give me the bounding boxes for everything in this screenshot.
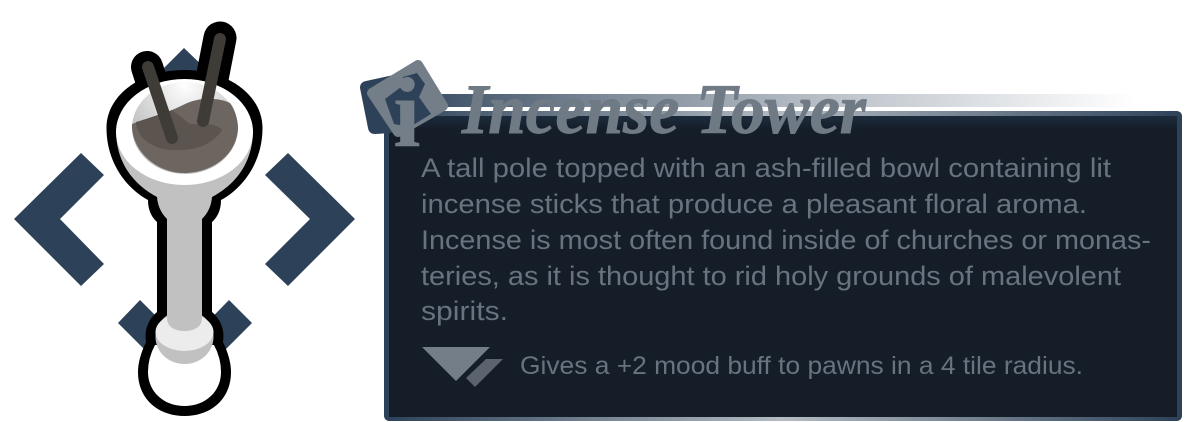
marker large triangle (422, 347, 490, 381)
badge inner mark (385, 73, 431, 127)
bowl underside (116, 130, 253, 320)
panel bottom border (384, 414, 1182, 421)
panel: description (384, 94, 1182, 421)
icon: incense tower (106, 38, 262, 416)
badge front square (372, 65, 443, 132)
text block: effect: Gives a +2 mood buff to pawns in a 4 tile radius. (520, 352, 1083, 380)
chevron: right (265, 153, 355, 286)
title: Incense Tower (461, 71, 867, 149)
badge back square (360, 74, 425, 134)
icon: info badge (360, 57, 443, 168)
panel top border (384, 111, 1182, 118)
marker small shard (466, 359, 503, 387)
text block: description: spirits. (421, 296, 508, 326)
title ribbon (386, 94, 1136, 108)
icon: effect marker (422, 347, 503, 387)
chevron: left (14, 153, 104, 286)
text block: description: incense sticks that produce a pleasant floral aroma. (421, 189, 1087, 219)
text block: description: Incense is most often found inside of churches or monas- (421, 225, 1151, 255)
badge letter: i (393, 57, 421, 168)
base collar (156, 310, 214, 364)
ash shadow (136, 110, 222, 150)
incense stick left (148, 67, 172, 138)
tower stem (167, 215, 202, 331)
tower outline (106, 38, 262, 416)
panel frame (384, 111, 1182, 421)
icon: directional chevrons (14, 48, 355, 390)
chevron: top (160, 48, 209, 72)
text block: description: teries, as it is thought to rid holy grounds of malevolent (421, 261, 1122, 291)
text block: description: A tall pole topped with an ash-filled bowl containing lit (421, 153, 1112, 183)
tower base ball (148, 345, 221, 406)
chevron: bottom (118, 300, 252, 390)
bowl interior (132, 82, 238, 174)
bowl rim (116, 79, 253, 185)
ash (132, 99, 238, 173)
incense stick right (203, 39, 220, 121)
title ribbon highlight (440, 107, 1100, 110)
panel body (389, 116, 1177, 417)
text block: description (421, 153, 1151, 326)
